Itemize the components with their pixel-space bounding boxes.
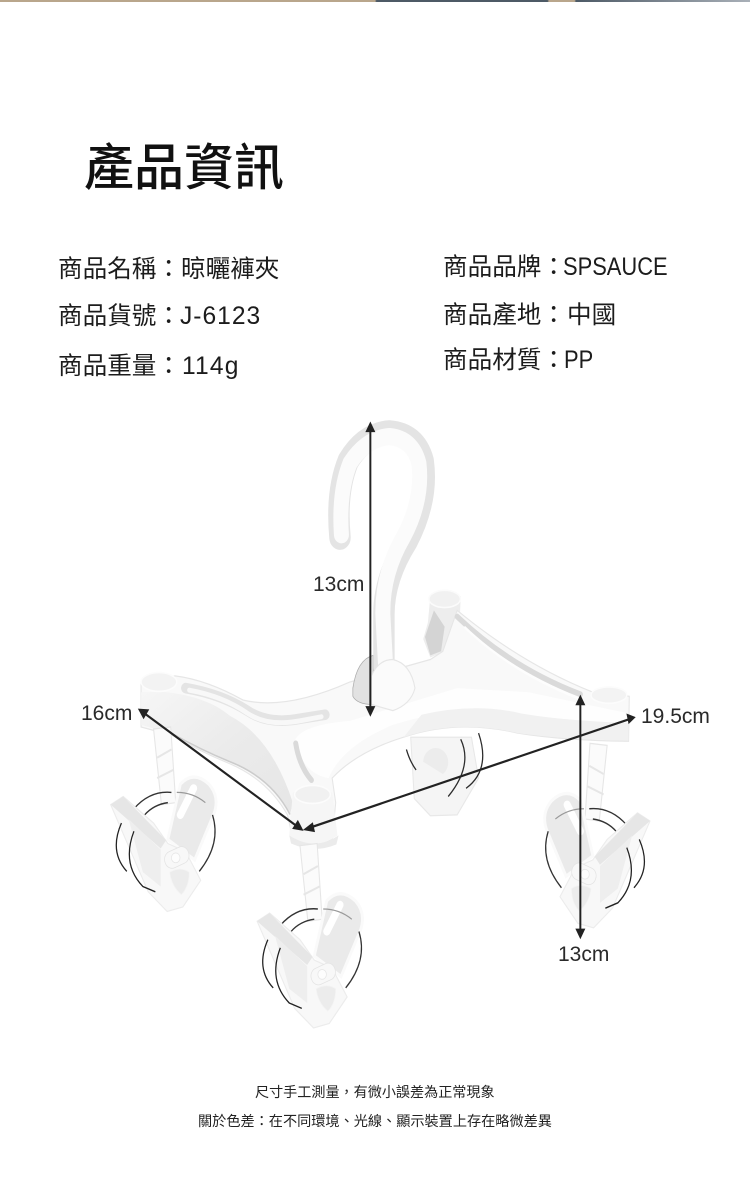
dimension label: clip 13cm: 13cm — [558, 943, 609, 966]
spec: product weight: 商品重量： — [58, 353, 181, 380]
clip: right — [545, 743, 650, 928]
dimension label: 16cm: 16cm — [81, 702, 132, 725]
spec: origin: 中國 — [567, 302, 616, 329]
spec: product weight: 114g — [182, 353, 240, 380]
clip: front — [257, 844, 362, 1028]
clip: left — [111, 727, 216, 911]
note: measurement: 尺寸手工測量，有微小誤差為正常現象 — [255, 1084, 495, 1100]
spec: material: 商品材質： — [443, 347, 566, 374]
spec: product number — [58, 303, 261, 330]
spec: brand: 商品品牌： — [443, 254, 566, 281]
dimension label: 19.5cm: 19.5cm — [641, 705, 710, 728]
spec: brand: SPSAUCE — [563, 254, 668, 281]
note: colour: 關於色差：在不同環境、光線、顯示裝置上存在略微差異 — [198, 1114, 552, 1130]
back-left arm and hub shadow — [423, 590, 461, 657]
dimension arrow: length 19.5cm — [303, 713, 636, 832]
spec: product name: 晾曬褲夾 — [181, 256, 279, 283]
spec: origin: 商品產地： — [443, 302, 566, 329]
spec: product number: 商品貨號： — [58, 303, 181, 330]
dimension arrow: clip height — [575, 695, 585, 939]
spec: product weight — [58, 353, 240, 380]
back clip — [406, 733, 483, 816]
spec: material: PP — [564, 347, 593, 374]
spec: brand — [443, 254, 668, 281]
spec: product number: J-6123 — [180, 303, 261, 330]
spec: product name — [58, 256, 279, 283]
top edge strip — [0, 0, 750, 2]
dimension label: hook 13cm: 13cm — [313, 573, 364, 596]
swivel hook — [339, 432, 424, 711]
dimension arrow: hook height — [365, 421, 375, 717]
title: 產品資訊 — [84, 140, 284, 196]
dimension arrow: width 16cm — [138, 709, 304, 831]
hanger body — [141, 610, 629, 849]
spec: product name: 商品名稱： — [58, 256, 181, 283]
